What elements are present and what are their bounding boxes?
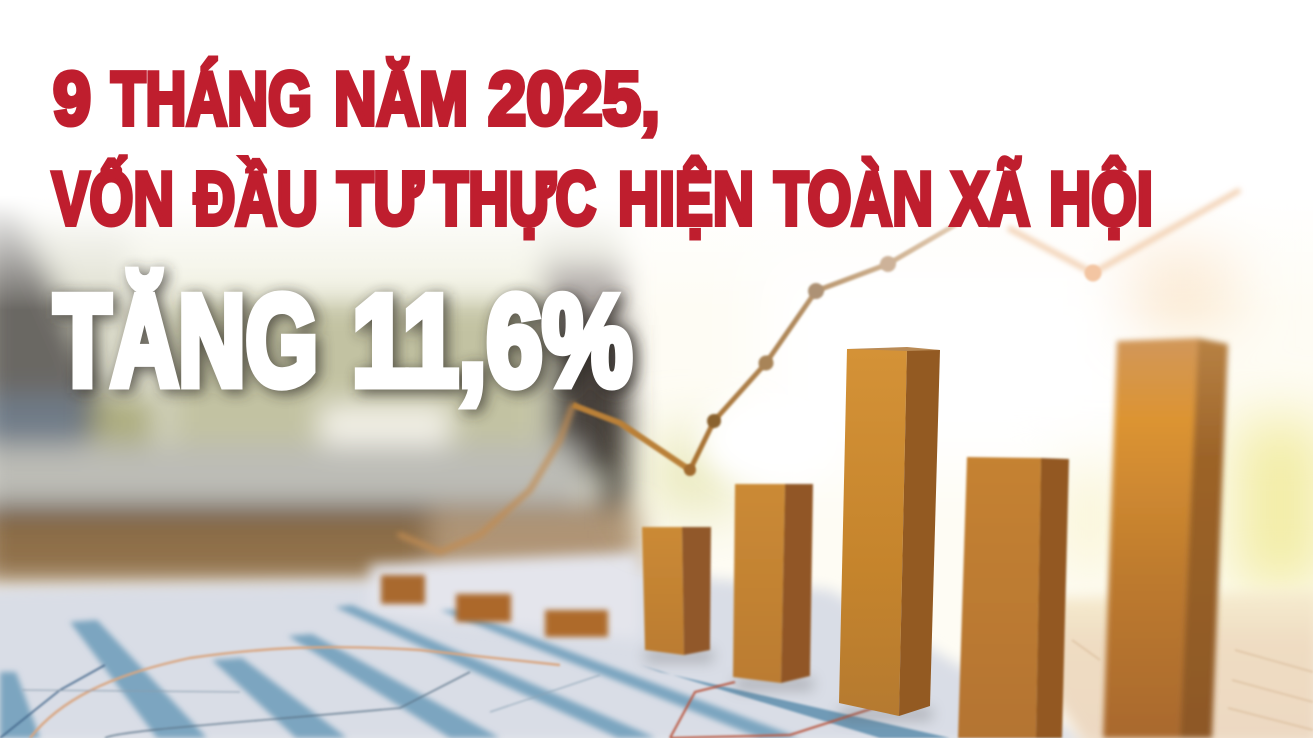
window glow right side xyxy=(650,220,1313,590)
title line 1: 9 xyxy=(53,56,91,140)
thin chart lines on paper xyxy=(0,647,600,738)
title line 2: TOÀN xyxy=(774,156,933,240)
title line 2 xyxy=(52,156,1153,240)
title line 2: HỘI xyxy=(1049,156,1153,240)
small blurred blocks xyxy=(381,575,608,637)
wood grain streaks xyxy=(1072,640,1313,730)
white glow under the trend line xyxy=(700,392,840,488)
headline shadow: TĂNG xyxy=(58,272,322,416)
paper with blue bar chart stripes xyxy=(0,605,950,738)
wooden table, right xyxy=(990,590,1313,738)
headline: tăng 11,6%: 11,6% xyxy=(352,269,632,413)
title line 1: 2025, xyxy=(488,56,660,140)
title line 1 xyxy=(53,56,660,140)
headline shadow: 11,6% xyxy=(356,272,636,416)
headline: tăng 11,6%: TĂNG xyxy=(54,269,318,413)
paper sheet xyxy=(0,572,1095,738)
bar 3 xyxy=(839,347,940,716)
headline: tăng 11,6% xyxy=(54,269,632,413)
title line 2: THỰC xyxy=(434,156,596,240)
title line 2: HIỆN xyxy=(618,156,754,240)
title line 2: ĐẦU xyxy=(194,156,318,240)
title line 1: THÁNG xyxy=(111,56,312,140)
title line 1: NĂM xyxy=(334,56,468,140)
title line 2: VỐN xyxy=(52,156,174,240)
title line 2: TƯ xyxy=(337,156,423,240)
bar 4 xyxy=(958,457,1069,738)
headline shadow xyxy=(58,272,636,416)
title line 2: XÃ xyxy=(951,156,1030,240)
bar 1 xyxy=(642,527,711,655)
bar 5 xyxy=(1103,338,1228,738)
trend markers xyxy=(684,256,1102,476)
rising trend line with markers xyxy=(400,190,1240,552)
bar 2 xyxy=(733,484,813,683)
title xyxy=(52,56,1153,240)
bar shadows xyxy=(645,650,932,720)
white fade at top xyxy=(0,0,1313,310)
